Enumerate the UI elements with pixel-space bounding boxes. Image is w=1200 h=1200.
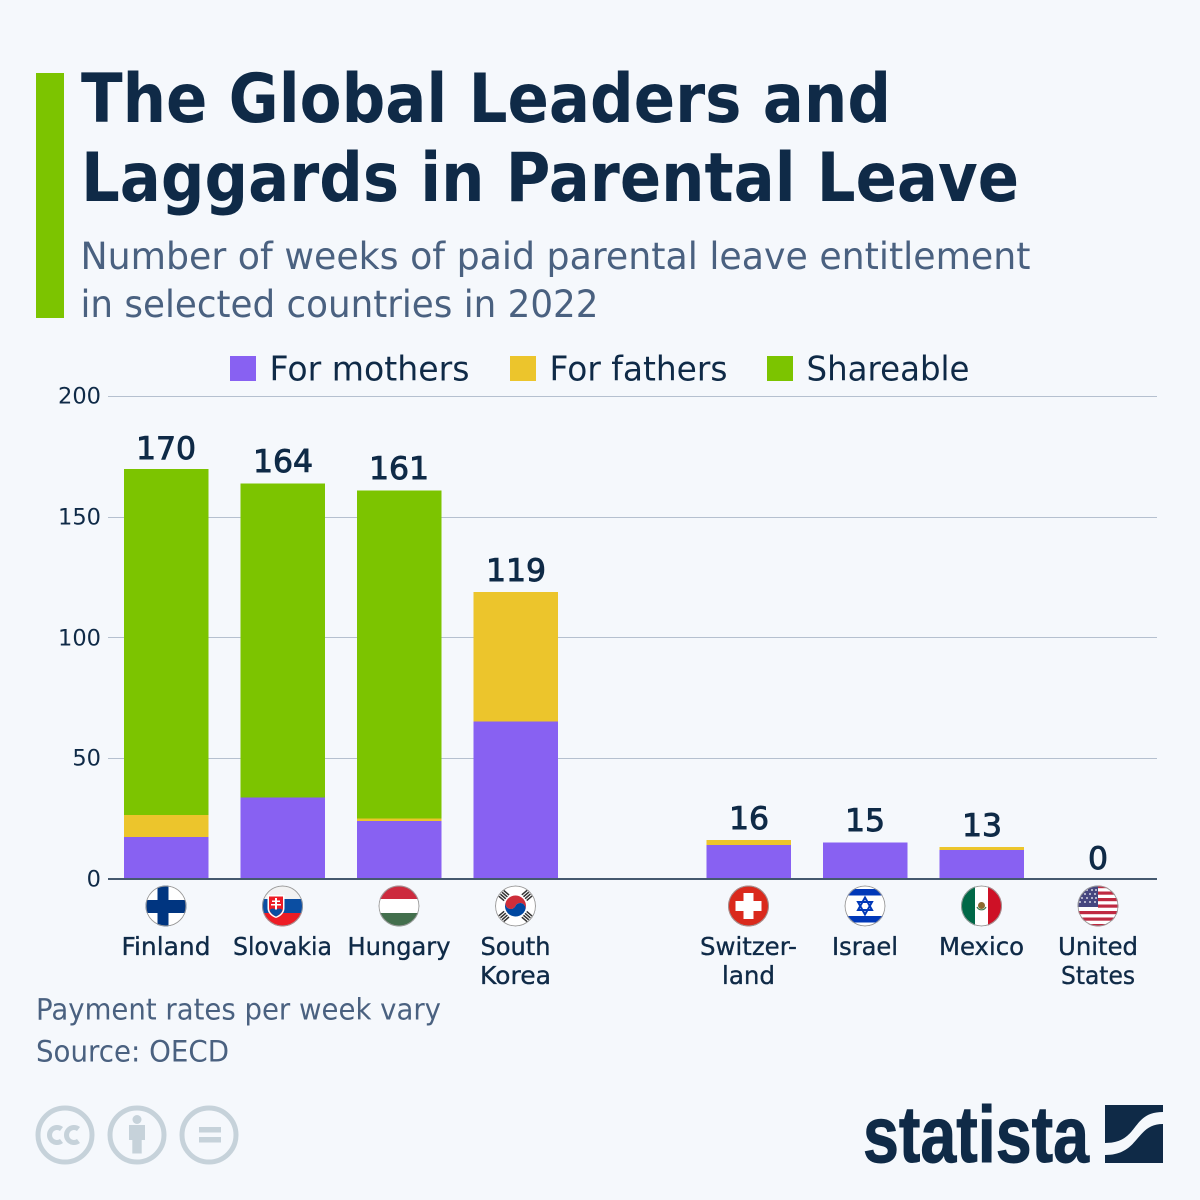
logo wordmark: statista [863, 1090, 1089, 1179]
value labels: 13 [962, 808, 1002, 844]
value labels: 161 [369, 451, 429, 487]
country labels: South [480, 932, 550, 961]
subtitle [80, 234, 1030, 326]
country labels: Mexico [939, 932, 1024, 961]
legend item: shareable: Shareable [806, 350, 970, 388]
value labels: 0 [1088, 841, 1108, 877]
country labels: land [722, 961, 775, 990]
icon: creative commons [38, 1108, 92, 1162]
icon: attribution [110, 1108, 164, 1162]
title accent bar [36, 73, 64, 318]
footnote and source: Source: OECD [36, 1034, 229, 1068]
footnote and source: Payment rates per week vary [36, 992, 441, 1026]
bar: Switzerland 16 [706, 840, 791, 879]
country labels: Finland [122, 932, 210, 961]
flag: Finland [145, 885, 187, 927]
icon: no derivatives [182, 1108, 236, 1162]
flag: Switzerland [728, 885, 770, 927]
bar: Israel 15 [823, 842, 908, 879]
title: Laggards in Parental Leave [81, 139, 1019, 218]
country labels: Korea [480, 961, 551, 990]
country labels [122, 932, 1138, 990]
legend item: for mothers: For mothers [270, 350, 470, 388]
bar: Hungary 161 [357, 490, 442, 879]
value labels: 15 [845, 803, 885, 839]
y axis labels [58, 384, 101, 892]
x axis line [108, 878, 1157, 880]
y axis labels: 100 [58, 626, 101, 652]
value labels [136, 431, 1108, 877]
value labels: 164 [253, 444, 313, 480]
bar: Finland 170 [124, 469, 208, 879]
footnote and source [36, 992, 441, 1068]
title [81, 60, 1019, 218]
bar: Mexico 13 [940, 847, 1024, 879]
y axis labels: 0 [87, 866, 101, 892]
subtitle: in selected countries in 2022 [80, 282, 598, 326]
bar: South Korea 119 [474, 592, 558, 879]
logo mark [1105, 1105, 1163, 1163]
flag: Slovakia [262, 885, 304, 927]
subtitle: Number of weeks of paid parental leave entitlement [80, 234, 1030, 278]
value labels: 16 [729, 801, 769, 837]
flag: Israel [844, 885, 886, 927]
country labels: United [1058, 932, 1138, 961]
flag: United States [1077, 885, 1119, 927]
y axis labels: 150 [58, 504, 101, 530]
country labels: Israel [832, 932, 898, 961]
value labels: 119 [486, 553, 546, 589]
y axis labels: 200 [58, 384, 101, 410]
bar chart [58, 384, 1157, 892]
country labels: Hungary [348, 932, 450, 961]
country labels: Switzer- [700, 932, 797, 961]
country labels: Slovakia [233, 932, 332, 961]
legend item: for fathers: For fathers [550, 350, 728, 388]
value labels: 170 [136, 431, 196, 467]
country labels: States [1061, 961, 1135, 990]
flag: Hungary [378, 885, 420, 927]
statista logo [863, 1090, 1163, 1179]
legend [230, 350, 970, 388]
y axis labels: 50 [72, 746, 101, 772]
flag: South Korea [495, 885, 537, 927]
title: The Global Leaders and [81, 60, 891, 139]
bar: Slovakia 164 [240, 484, 325, 879]
flag: Mexico [961, 885, 1003, 927]
